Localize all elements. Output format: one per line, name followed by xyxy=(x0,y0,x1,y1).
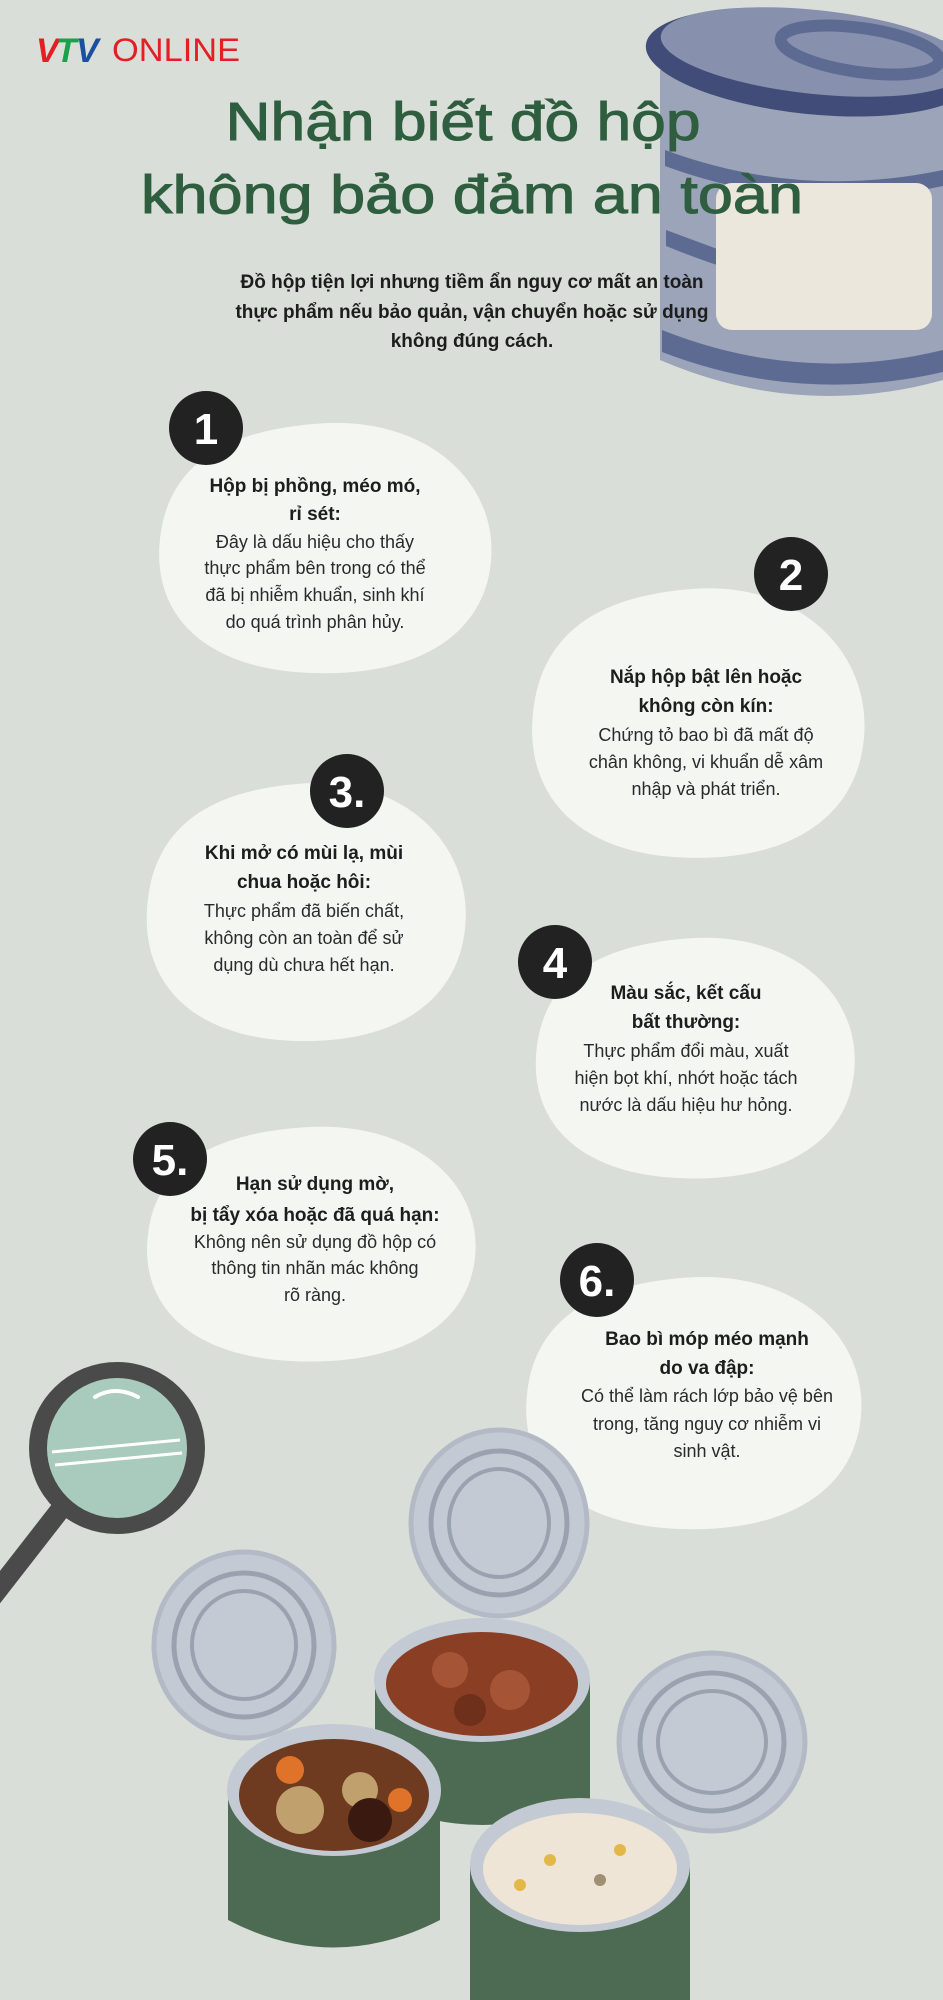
subtitle: thực phẩm nếu bảo quản, vận chuyển hoặc sử dụng xyxy=(235,302,709,323)
title: không bảo đảm an toàn xyxy=(141,165,803,225)
panel 3: chua hoặc hôi: xyxy=(237,872,371,893)
panel 3: không còn an toàn để sử xyxy=(204,928,404,948)
subtitle: Đồ hộp tiện lợi nhưng tiềm ẩn nguy cơ mất an toàn xyxy=(240,272,704,293)
lid: right xyxy=(619,1653,805,1831)
panel 1: Hộp bị phồng, méo mó, xyxy=(209,476,421,497)
panel 4: hiện bọt khí, nhớt hoặc tách xyxy=(575,1068,797,1088)
panel 6: trong, tăng nguy cơ nhiễm vi xyxy=(593,1413,821,1434)
logo: VTV ONLINE: V xyxy=(76,32,102,70)
panel 1: do quá trình phân hủy. xyxy=(226,612,404,632)
panel 6: sinh vật. xyxy=(673,1441,741,1461)
panel 4: bất thường: xyxy=(632,1012,740,1033)
logo: VTV ONLINE xyxy=(36,32,240,70)
panel 5: rõ ràng. xyxy=(284,1285,346,1305)
logo: VTV ONLINE: V xyxy=(36,32,62,70)
panel 1: rỉ sét: xyxy=(289,504,341,525)
panel 1: Đây là dấu hiệu cho thấy xyxy=(216,532,414,552)
panel 2: chân không, vi khuẩn dễ xâm xyxy=(589,751,823,772)
panel 5: Không nên sử dụng đồ hộp có xyxy=(194,1232,436,1252)
subtitle xyxy=(235,272,709,352)
panel 2 xyxy=(532,537,865,858)
lid: middle xyxy=(411,1430,587,1616)
panel 6: Có thể làm rách lớp bảo vệ bên xyxy=(581,1386,833,1406)
logo: VTV ONLINE: ONLINE xyxy=(112,32,240,68)
panel 3: 3. xyxy=(329,768,365,817)
panel 3 xyxy=(147,754,466,1041)
logo: VTV ONLINE: T xyxy=(56,32,80,70)
title xyxy=(141,92,803,225)
title: Nhận biết đồ hộp xyxy=(226,92,700,152)
panel 4: Thực phẩm đổi màu, xuất xyxy=(583,1041,789,1061)
panel 5: Hạn sử dụng mờ, xyxy=(236,1174,394,1195)
panel 5: 5. xyxy=(152,1136,188,1185)
icon: magnifying glass xyxy=(0,1362,205,1600)
panel 5: bị tẩy xóa hoặc đã quá hạn: xyxy=(190,1205,440,1226)
panel 3: dụng dù chưa hết hạn. xyxy=(213,955,395,975)
can: right xyxy=(470,1798,690,2000)
panel 3: Thực phẩm đã biến chất, xyxy=(204,901,404,921)
panel 1: đã bị nhiễm khuẩn, sinh khí xyxy=(205,584,425,605)
panel 6: do va đập: xyxy=(659,1358,755,1379)
panel 2: không còn kín: xyxy=(638,696,774,717)
panel 6: 6. xyxy=(579,1257,615,1306)
can: middle brown xyxy=(374,1618,590,1825)
panel 2: Nắp hộp bật lên hoặc xyxy=(610,666,802,688)
panel 6 xyxy=(526,1243,861,1529)
panel 2: 2 xyxy=(779,551,803,600)
panel 4: nước là dấu hiệu hư hỏng. xyxy=(579,1095,793,1115)
subtitle: không đúng cách. xyxy=(391,331,553,352)
panel 2: nhập và phát triển. xyxy=(631,779,781,799)
panel 4: 4 xyxy=(543,939,568,988)
panel 3: Khi mở có mùi lạ, mùi xyxy=(205,843,403,864)
panel 6: Bao bì móp méo mạnh xyxy=(605,1329,809,1350)
can: left xyxy=(227,1724,441,1948)
panel 2: Chứng tỏ bao bì đã mất độ xyxy=(598,725,814,745)
panel 1: 1 xyxy=(194,405,218,454)
panel 5 xyxy=(133,1122,476,1362)
illustration: top right can xyxy=(640,0,943,396)
illustration: open cans xyxy=(154,1430,805,2000)
panel 1: thực phẩm bên trong có thể xyxy=(204,558,426,578)
panel 4: Màu sắc, kết cấu xyxy=(610,982,762,1004)
lid: left xyxy=(154,1552,334,1738)
panel 5: thông tin nhãn mác không xyxy=(211,1258,419,1278)
panel 1 xyxy=(159,391,492,673)
panel 4 xyxy=(518,925,855,1178)
